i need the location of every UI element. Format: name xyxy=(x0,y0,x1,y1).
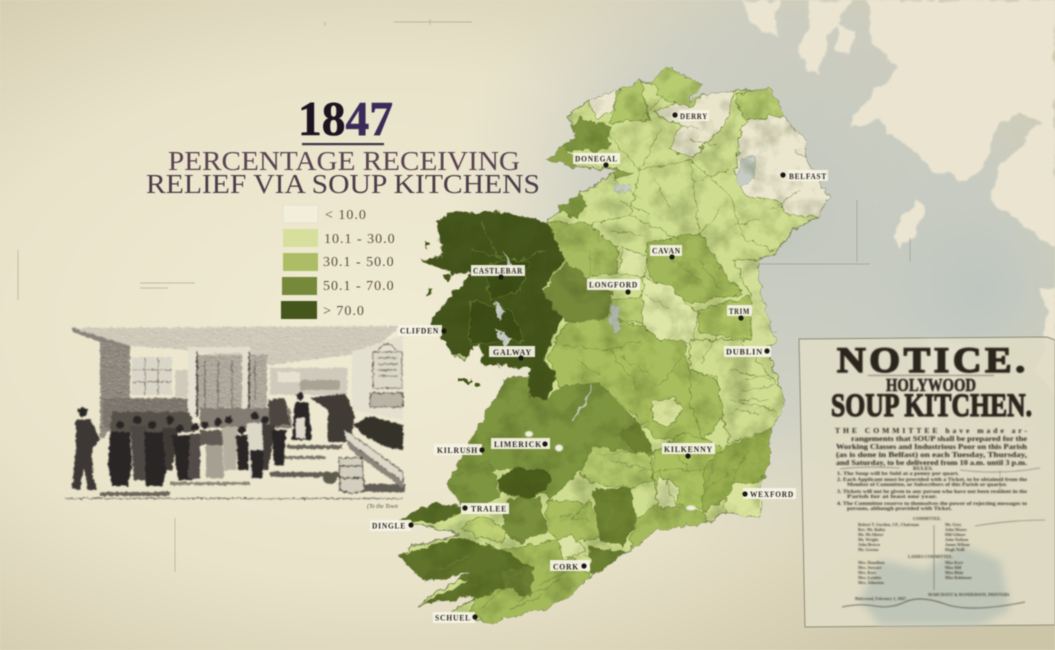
label Longford: LONGFORD xyxy=(589,280,638,290)
map: neighbouring Britain coastline xyxy=(740,0,1055,400)
poster body text: COMMITTEE. xyxy=(913,516,941,521)
Ireland base land xyxy=(400,67,828,623)
room structure xyxy=(72,326,403,442)
label Limerick: LIMERICK xyxy=(494,439,542,449)
poster body text: 1. The Soup will be Sold at a penny per quart. xyxy=(837,471,960,477)
label Donegal xyxy=(573,153,620,168)
label Dingle: DINGLE xyxy=(372,520,406,530)
poster body text: RULES. xyxy=(913,466,934,472)
legend item under 10: < 10.0 xyxy=(325,208,367,223)
label Galway xyxy=(489,346,535,361)
label Galway: GALWAY xyxy=(493,347,532,357)
label Clifden: CLIFDEN xyxy=(400,326,439,336)
title: year: 1847 xyxy=(298,91,393,146)
legend xyxy=(281,205,396,319)
poster body text: Mr. Wright xyxy=(858,537,879,542)
poster body text: Mrs. Lynden xyxy=(858,575,882,580)
poster body text: Hugh Neill xyxy=(945,547,965,552)
poster body text: (as is done in Belfast) on each Tuesday, Thursday, xyxy=(836,450,1027,459)
poster body text: Mrs. Stewart xyxy=(858,565,882,570)
poster headline xyxy=(831,341,1032,424)
soup barrel xyxy=(323,458,364,494)
poster body text: John Brown xyxy=(858,542,881,547)
engraving caption: (To the Town xyxy=(367,503,398,510)
poster body text: Mrs. Hamilton xyxy=(858,560,885,565)
label Tralee: TRALEE xyxy=(471,504,507,514)
poster: Holywood soup kitchen notice xyxy=(799,337,1055,627)
poster body text: Mr. Greene xyxy=(858,547,879,552)
poster body text: and Saturday, to be delivered from 10 a.m. until 3 p.m. xyxy=(836,458,1027,467)
poster body text: Mrs. Johnston xyxy=(858,580,884,585)
subtitle line 1: PERCENTAGE RECEIVING xyxy=(168,146,520,176)
label Belfast: BELFAST xyxy=(789,171,827,181)
poster body text: Miss Robinson xyxy=(945,575,972,580)
poster body text: LADIES COMMITTEE. xyxy=(908,554,953,559)
poster body text: James Wilson xyxy=(945,542,970,547)
label Derry xyxy=(672,110,709,121)
poster body text: Mr. McAlister xyxy=(858,532,884,537)
poster body text: rangements that SOUP shall be prepared for the xyxy=(851,434,1028,443)
label Wexford: WEXFORD xyxy=(750,489,794,499)
label Cork: CORK xyxy=(553,562,579,572)
crowd of figures xyxy=(72,392,312,490)
label Trim xyxy=(727,305,752,321)
legend item over 70: > 70.0 xyxy=(323,304,365,319)
label Derry: DERRY xyxy=(680,111,708,121)
label Cavan: CAVAN xyxy=(652,246,681,256)
label Kilrush: KILRUSH xyxy=(437,445,478,455)
place labels xyxy=(370,110,828,623)
poster body text: Miss Kerr xyxy=(945,560,963,565)
table and diners xyxy=(343,416,403,488)
west coast islands xyxy=(425,240,480,389)
poster body text: Holywood, February 1, 1847. xyxy=(855,596,907,601)
poster body text xyxy=(835,426,1045,608)
poster body text: Miss Blair xyxy=(945,570,964,575)
lakes and rivers xyxy=(495,156,756,420)
map: Ireland soup kitchen choropleth xyxy=(395,60,835,630)
poster body text: 3. Tickets will not be given to any person who have not been resident in the xyxy=(837,489,1028,495)
label Schuel: SCHUEL xyxy=(435,612,471,622)
poster body text: Working Classes and Industrious Poor on this Parish xyxy=(836,442,1028,451)
poster body text: Hill Gilmer xyxy=(945,532,966,537)
label Longford xyxy=(587,279,640,295)
poster body text: Parish for at least one year. xyxy=(847,494,938,500)
poster body text: Mrs. Kerr xyxy=(858,570,877,575)
label Donegal: DONEGAL xyxy=(575,154,618,164)
legend item 10 to 30: 10.1 - 30.0 xyxy=(324,232,396,247)
legend item 50 to 70: 50.1 - 70.0 xyxy=(323,279,395,294)
poster body text: 4. The Committee reserve to themselves the power of rejecting messages to xyxy=(837,501,1027,507)
floor shading xyxy=(65,445,405,499)
label Tralee xyxy=(461,503,509,514)
label Castlebar: CASTLEBAR xyxy=(473,266,523,276)
label Dublin: DUBLIN xyxy=(726,346,763,356)
subtitle line 2: RELIEF VIA SOUP KITCHENS xyxy=(146,169,540,199)
label Cork xyxy=(550,560,590,572)
label Trim: TRIM xyxy=(729,306,750,316)
relief hachures xyxy=(430,125,815,590)
poster body text: Miss Hill xyxy=(945,565,962,570)
label Cavan xyxy=(650,245,682,260)
poster body text: John Moore xyxy=(945,527,967,532)
poster headline: HOLYWOOD xyxy=(886,375,976,395)
illustration: soup kitchen engraving xyxy=(65,326,405,499)
legend item 30 to 50: 30.1 - 50.0 xyxy=(323,255,395,270)
title rule xyxy=(302,143,384,145)
poster body text: Mr. Grey xyxy=(945,522,962,527)
poster body text: persons, although provided with Ticket. xyxy=(847,506,953,512)
label Belfast xyxy=(780,170,828,181)
map mottled shading xyxy=(395,60,835,630)
poster body text: Member of Committee, or Subscribers of this Parish or quarter. xyxy=(847,482,1008,488)
label Kilkenny xyxy=(662,443,715,459)
white spots on map xyxy=(525,431,696,510)
label Castlebar xyxy=(471,265,525,280)
poster body text: THE COMMITTEE have made ar- xyxy=(835,426,1027,435)
poster sheet xyxy=(799,337,1055,627)
poster body text: John Neilson xyxy=(945,537,969,542)
poster body text: Rev. Mr. Bailey xyxy=(858,527,886,532)
label Kilkenny: KILKENNY xyxy=(664,444,713,454)
poster body text: Robert T. Gordon, J.P., Chairman xyxy=(858,522,920,527)
county regions clipped to the island xyxy=(395,60,835,630)
poster headline: NOTICE. xyxy=(837,341,1025,381)
poster body text: MARCHANT & MANDERSON, PRINTERS xyxy=(928,592,1010,597)
county and barony border lines xyxy=(470,95,775,610)
poster body text: 2. Each Applicant must be provided with a Ticket, to be obtained from the xyxy=(837,477,1028,483)
title block xyxy=(146,91,540,199)
